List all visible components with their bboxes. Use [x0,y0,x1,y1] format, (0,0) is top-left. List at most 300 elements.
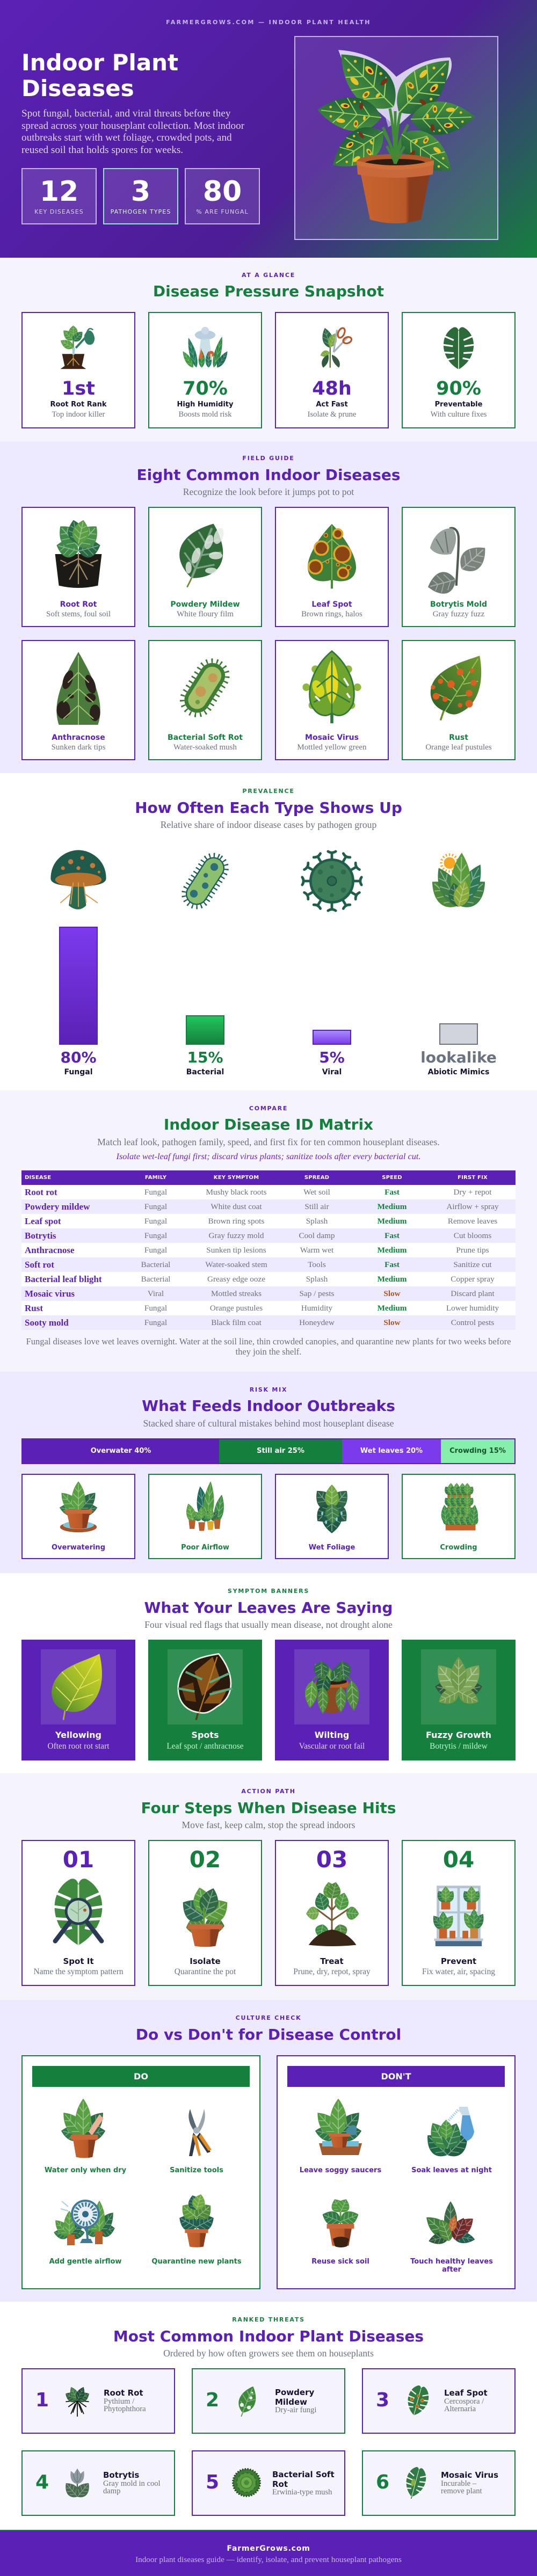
table: disease matrix: Lower humidity [446,1304,499,1313]
label: Touch healthy leaves [410,2258,493,2266]
table: disease matrix: Fungal [144,1304,167,1313]
name: Bacterial Soft Rot [168,733,243,742]
table: disease matrix: Black film coat [211,1318,262,1327]
footnote: Fungal diseases love wet leaves overnight. Water at the soil line, thin crowded canopies, and quarantine new plants for two weeks before [26,1336,511,1347]
icon: mosaic monstera leaf [400,2466,432,2499]
description: Soft stems, foul soil [46,610,111,618]
table: disease matrix: Fast [384,1231,400,1240]
hero intro text: reused soil that holds spores for weeks. [21,144,183,156]
detail: Dry-air fungi [275,2406,316,2414]
table: disease matrix: Sanitize cut [453,1260,492,1269]
value: 48h [312,378,352,399]
title [21,49,178,101]
value: 80 percent: 80% [60,1049,97,1066]
description: Water-soaked mush [173,743,237,752]
detail: Pythium / [104,2397,134,2406]
card: overwatering [21,1474,135,1559]
table: disease matrix: Fungal [144,1217,167,1226]
segment: overwater [23,1439,219,1463]
name: Poor Airflow [181,1544,229,1552]
hero section [0,0,537,258]
footnote [26,1336,511,1357]
table: disease matrix: Medium [378,1246,407,1255]
name: Leaf Spot [444,2388,488,2398]
card: root rot [21,507,135,627]
icon: pruners [188,2109,212,2156]
description: Vascular or root fail [299,1742,365,1751]
label: High Humidity [177,401,233,409]
segment: wet leaves: Wet leaves 20% [360,1447,423,1455]
table: disease matrix: Water-soaked stem [205,1260,267,1269]
detail: Gray mold in cool [103,2479,161,2488]
rank number: 3 [376,2389,389,2411]
step 1: spot it [21,1840,135,1986]
label: Sanitize tools [170,2166,223,2174]
table: disease matrix: Sooty mold [25,1318,69,1328]
icon: leaf spot monstera [402,2384,434,2417]
table: disease matrix: Splash [306,1217,328,1226]
table: disease matrix: Anthracnose [25,1245,75,1255]
rank card 1 [21,2368,175,2434]
name: Botrytis Mold [430,600,487,609]
table: disease matrix: Fast [384,1260,400,1269]
name: Fuzzy Growth [426,1730,491,1740]
table: disease matrix: Control pests [451,1318,494,1327]
table: disease matrix: Sap / pests [300,1289,334,1298]
stat: pathogen types: 3 [131,176,150,208]
detail: damp [103,2487,120,2495]
icon: pot in water saucer [59,1481,98,1532]
card: anthracnose [21,640,135,760]
table: disease matrix: Botrytis [25,1231,56,1241]
step number: 03 [316,1846,347,1873]
name [275,2388,314,2407]
name: Spots [191,1730,219,1740]
kicker: SYMPTOM BANNERS [228,1588,309,1595]
stacked bar [21,1438,516,1464]
note: With culture fixes [431,410,487,419]
name: Rust [449,733,468,742]
name: Mildew [275,2397,307,2407]
hero intro text: Spot fungal, bacterial, and viral threats before they [21,108,230,119]
rank card 3 [362,2368,516,2434]
name: Wilting [315,1730,349,1740]
table: disease matrix: FAMILY [145,1175,166,1181]
icon: bacterium [179,658,230,717]
step number: 01 [63,1846,94,1873]
title: Diseases [21,75,134,101]
icon: magnifier over leaf [53,1879,104,1946]
table: disease matrix: Prune tips [456,1246,489,1255]
name: Root Rot [104,2388,143,2398]
rank card 5 [192,2450,345,2516]
note: Top indoor killer [52,410,105,419]
label: Preventable [435,401,482,409]
step 4: prevent [402,1840,516,1986]
subheading: Recognize the look before it jumps pot to pot [183,486,354,497]
label: viral: Viral [322,1068,342,1076]
value: 1st [62,378,95,399]
subheading: Match leaf look, pathogen family, speed, and first fix for ten common houseplant diseases. [97,1137,440,1147]
heading: Eight Common Indoor Diseases [136,466,401,484]
card: leaf spot [275,507,389,627]
kicker: RISK MIX [250,1386,287,1393]
heading: Indoor Disease ID Matrix [164,1116,373,1133]
table: disease matrix: Airflow + spray [446,1202,499,1211]
section: ranked threats [0,2302,537,2530]
value: 15 percent: 15% [187,1049,223,1066]
description: Prune, dry, repot, spray [293,1967,371,1976]
stat: percent fungal: 80 [203,176,242,208]
icon: powdery mildew leaf [179,524,223,587]
subheading: Ordered by how often growers see them on houseplants [163,2348,374,2359]
image tile: wilted plant [294,1649,369,1724]
kicker: FIELD GUIDE [242,455,295,462]
segment: still air [219,1439,342,1463]
icon: botrytis gray flower [428,527,485,594]
name: Wet Foliage [309,1544,355,1552]
table: disease matrix: Copper spray [451,1275,495,1284]
step number: 04 [443,1846,474,1873]
table: disease matrix: Fast [384,1188,400,1197]
value: 70% [183,378,228,399]
table: disease matrix: Mosaic virus [25,1289,75,1299]
value: 90% [436,378,481,399]
name: Spot It [63,1956,93,1966]
table: disease matrix: Leaf spot [25,1216,61,1226]
table: disease matrix: FIRST FIX [458,1175,488,1181]
table: disease matrix: SPEED [382,1175,402,1181]
table: disease matrix: Dry + repot [453,1188,491,1197]
hero intro text [21,108,244,156]
icon: spraying leaves [427,2107,474,2156]
heading: Most Common Indoor Plant Diseases [113,2327,424,2345]
name: Root Rot [60,600,97,609]
heading: Disease Pressure Snapshot [153,282,384,300]
icon: healthy monstera leaf [444,327,474,369]
banner: wilting [275,1640,389,1760]
footnote: they join the shelf. [236,1347,301,1357]
table: disease matrix: Discard plant [451,1289,495,1298]
stat card: preventable [402,312,516,428]
kicker: COMPARE [249,1105,288,1112]
icon: bacterium [182,853,229,909]
table: disease matrix: Bacterial leaf blight [25,1274,102,1284]
step 2: isolate [148,1840,262,1986]
kicker: AT A GLANCE [242,272,295,279]
heading: What Your Leaves Are Saying [144,1599,393,1617]
section: disease matrix [0,1090,537,1372]
card: powdery mildew [148,507,262,627]
panel: don't [277,2055,516,2289]
name: Overwatering [52,1544,105,1552]
description: Orange leaf pustules [425,743,492,752]
label: Act Fast [316,401,348,409]
detail: Cercospora / [444,2397,484,2406]
image tile: fuzzy plant [421,1649,496,1724]
card: poor airflow [148,1474,262,1559]
rank number: 6 [376,2471,389,2493]
image tile: yellow leaf [41,1649,116,1724]
detail: Erwinia-type mush [272,2488,332,2497]
name: Anthracnose [52,733,105,742]
description: Brown rings, halos [301,610,362,618]
table: disease matrix: Slow [383,1289,401,1298]
don't header [287,2066,505,2087]
name: Mosaic Virus [441,2470,498,2480]
segment: crowding: Crowding 15% [449,1447,506,1455]
heading: How Often Each Type Shows Up [135,799,402,817]
step number: 02 [190,1846,221,1873]
icon: powdery leaf [238,2386,256,2417]
detail: remove plant [441,2487,482,2495]
name: Yellowing [55,1730,101,1740]
stat: key diseases [21,168,97,224]
subheading: Relative share of indoor disease cases by pathogen group [161,819,376,830]
card: bacterial soft rot [148,640,262,760]
rank card 4 [21,2450,175,2516]
segment: still air: Still air 25% [257,1447,304,1455]
name: Bacterial Soft [272,2470,335,2479]
table: disease matrix: Slow [383,1318,401,1327]
detail: Alternaria [444,2405,476,2413]
heading: Four Steps When Disease Hits [141,1799,396,1817]
rank number: 5 [206,2471,219,2493]
description: Quarantine the pot [175,1967,236,1976]
table: disease matrix: Medium [378,1275,407,1284]
table: disease matrix: Cut blooms [454,1231,491,1240]
table: disease matrix: Honeydew [299,1318,335,1327]
description: Mottled yellow green [297,743,367,752]
name: Treat [320,1956,344,1966]
icon: root rot [66,2387,89,2417]
italic tip: Isolate wet-leaf fungi first; discard virus plants; sanitize tools after every bacterial cut. [117,1151,420,1161]
icon: rust leaf [431,656,481,721]
label: Soak leaves at night [411,2166,492,2174]
label: fungal: Fungal [64,1068,93,1076]
section: eight common diseases [0,441,537,773]
description: White floury film [177,610,234,618]
name: Rot [272,2479,288,2489]
description: Botrytis / mildew [430,1742,488,1751]
section: do vs don't [0,2000,537,2302]
footer tagline: Indoor plant diseases guide — identify, isolate, and prevent houseplant pathogens [135,2555,402,2564]
name: Botrytis [103,2470,139,2480]
icon: soft rot rosette [230,2466,263,2499]
rank number: 2 [206,2389,219,2411]
detail [103,2480,161,2495]
bar: viral [313,1030,351,1045]
name [272,2470,335,2489]
table: disease matrix: Rust [25,1303,43,1313]
table: disease matrix: Greasy edge ooze [207,1275,265,1284]
table: disease matrix: Humidity [301,1304,332,1313]
table: disease matrix: Wet soil [303,1188,330,1197]
description: Name the symptom pattern [33,1967,124,1976]
detail: Incurable – [441,2479,476,2488]
icon: crowded plant shelf [441,1483,478,1530]
subheading: Move fast, keep calm, stop the spread indoors [182,1820,355,1830]
table: disease matrix: Orange pustules [210,1304,263,1313]
icon: humid cloud over plants [183,326,228,368]
icon: water only when dry [61,2098,105,2158]
table: disease matrix: Remove leaves [448,1217,497,1226]
stat: key diseases: KEY DISEASES [34,208,84,215]
table: disease matrix: SPREAD [304,1175,329,1181]
rank card 2 [192,2368,345,2434]
icon: quarantine plant [179,2194,214,2247]
icon: pruned plant in soil [306,1882,359,1946]
icon: botrytis gray bud [61,2466,93,2499]
label: Reuse sick soil [311,2258,369,2266]
icon: soggy saucer [315,2098,362,2155]
table: disease matrix: Tools [308,1260,326,1269]
table: disease matrix [21,1170,516,1330]
do header [32,2066,250,2087]
name: Isolate [190,1956,221,1966]
table: disease matrix: Fungal [144,1246,167,1255]
step 3: treat [275,1840,389,1986]
description: Leaf spot / anthracnose [166,1742,244,1751]
table: disease matrix: Still air [304,1202,329,1211]
section: disease pressure snapshot [0,258,537,441]
stat: key diseases: 12 [40,176,78,208]
table: disease matrix: KEY SYMPTOM [214,1175,259,1181]
stat: percent fungal [185,168,260,224]
table: disease matrix: Viral [148,1289,164,1298]
table: disease matrix: Gray fuzzy mold [209,1231,264,1240]
section: symptom banners [0,1573,537,1773]
table: disease matrix: Medium [378,1217,407,1226]
card: crowding [402,1474,516,1559]
section: prevalence bar chart [0,773,537,1090]
rank card 6 [362,2450,516,2516]
do header: DO [134,2071,148,2082]
note: Isolate & prune [308,410,356,419]
label: bacterial: Bacterial [186,1068,224,1076]
icon: watering a root-bound plant [60,325,95,369]
table: disease matrix: Warm wet [300,1246,333,1255]
section: action path [0,1773,537,2000]
name: Leaf Spot [311,600,352,609]
title: Indoor Plant [21,49,178,76]
label [410,2258,493,2274]
icon: isolated potted plant [183,1888,228,1947]
detail [444,2398,484,2413]
segment: wet leaves [342,1439,441,1463]
hero intro text: spread across your houseplant collection. Most indoor [21,120,244,131]
card: botrytis mold [402,507,516,627]
icon: root rot [55,520,102,588]
hero illustration: diseased potted plant [294,36,498,240]
table: disease matrix: Cool damp [299,1231,335,1240]
table: disease matrix: Bacterial [141,1275,170,1284]
icon: virus [301,850,363,912]
section: outbreak risk mix [0,1372,537,1573]
kicker: PREVALENCE [242,788,295,795]
segment: overwater: Overwater 40% [91,1447,151,1455]
icon: fan airflow [54,2200,115,2245]
name: Mosaic Virus [305,733,359,742]
icon: mosaic leaf [302,650,361,724]
kicker: CULTURE CHECK [236,2014,301,2021]
label: Leave soggy saucers [300,2166,381,2174]
stat: pathogen types [103,168,178,224]
rank number: 1 [35,2389,49,2411]
name: Powdery [275,2388,314,2397]
icon: sick soil pot [322,2199,359,2247]
card: rust [402,640,516,760]
stat card: root rot rank [21,312,135,428]
table: disease matrix: Mottled streaks [211,1289,262,1298]
footer [0,2530,537,2576]
table: disease matrix: Splash [306,1275,328,1284]
label: abiotic mimics: Abiotic Mimics [428,1068,489,1076]
table: disease matrix: Medium [378,1202,407,1211]
icon: wet leaves [316,1485,347,1533]
don't header: DON'T [381,2071,411,2082]
stat: pathogen types: PATHOGEN TYPES [111,208,171,215]
table: disease matrix: Fungal [144,1231,167,1240]
heading: What Feeds Indoor Outbreaks [142,1397,395,1415]
detail [104,2397,146,2413]
table: disease matrix: Soft rot [25,1260,54,1270]
stat: percent fungal: % ARE FUNGAL [196,208,249,215]
table: disease matrix: Sunken tip lesions [206,1246,266,1255]
rank number: 4 [35,2471,49,2493]
label: Root Rot Rank [50,401,106,409]
detail: Phytophthora [104,2405,146,2413]
description: Fix water, air, spacing [422,1967,495,1976]
name: Crowding [440,1544,477,1552]
value: 5 percent: 5% [319,1049,345,1066]
icon: sun-stressed plant [432,853,485,907]
bar: bacterial [186,1015,224,1045]
icon: plants in a window [433,1886,484,1946]
table: disease matrix: DISEASE [25,1175,51,1181]
name: Powdery Mildew [170,600,240,609]
stat card: high humidity [148,312,262,428]
table: disease matrix: Mushy black roots [206,1188,267,1197]
note: Boosts mold risk [179,410,231,419]
panel: do [21,2055,260,2289]
table: disease matrix: Brown ring spots [208,1217,264,1226]
kicker: ACTION PATH [241,1788,296,1795]
detail [441,2480,482,2495]
value: lookalike: lookalike [420,1049,497,1066]
description: Sunken dark tips [52,743,105,752]
table: disease matrix: Powdery mildew [25,1202,90,1212]
name: Prevent [441,1956,476,1966]
icon: leaf spot [307,524,356,588]
subheading: Four visual red flags that usually mean disease, not drought alone [144,1619,393,1630]
icon: fungal mushroom [50,850,106,909]
heading: Do vs Don't for Disease Control [136,2026,401,2043]
hero kicker: FARMERGROWS.COM — INDOOR PLANT HEALTH [166,19,371,26]
bar: abiotic [439,1023,478,1045]
icon: pruning scissors on leaves [320,327,352,368]
table: disease matrix: Root rot [25,1187,57,1197]
table: disease matrix: Bacterial [141,1260,170,1269]
table: disease matrix: Fungal [144,1188,167,1197]
icon: touching red leaves [426,2201,475,2244]
card: mosaic virus [275,640,389,760]
icon: crowded group of pots [186,1481,224,1531]
description: Often root rot start [47,1742,109,1751]
table: disease matrix: White dust coat [211,1202,262,1211]
table: disease matrix: Fungal [144,1202,167,1211]
segment: crowding [441,1439,514,1463]
